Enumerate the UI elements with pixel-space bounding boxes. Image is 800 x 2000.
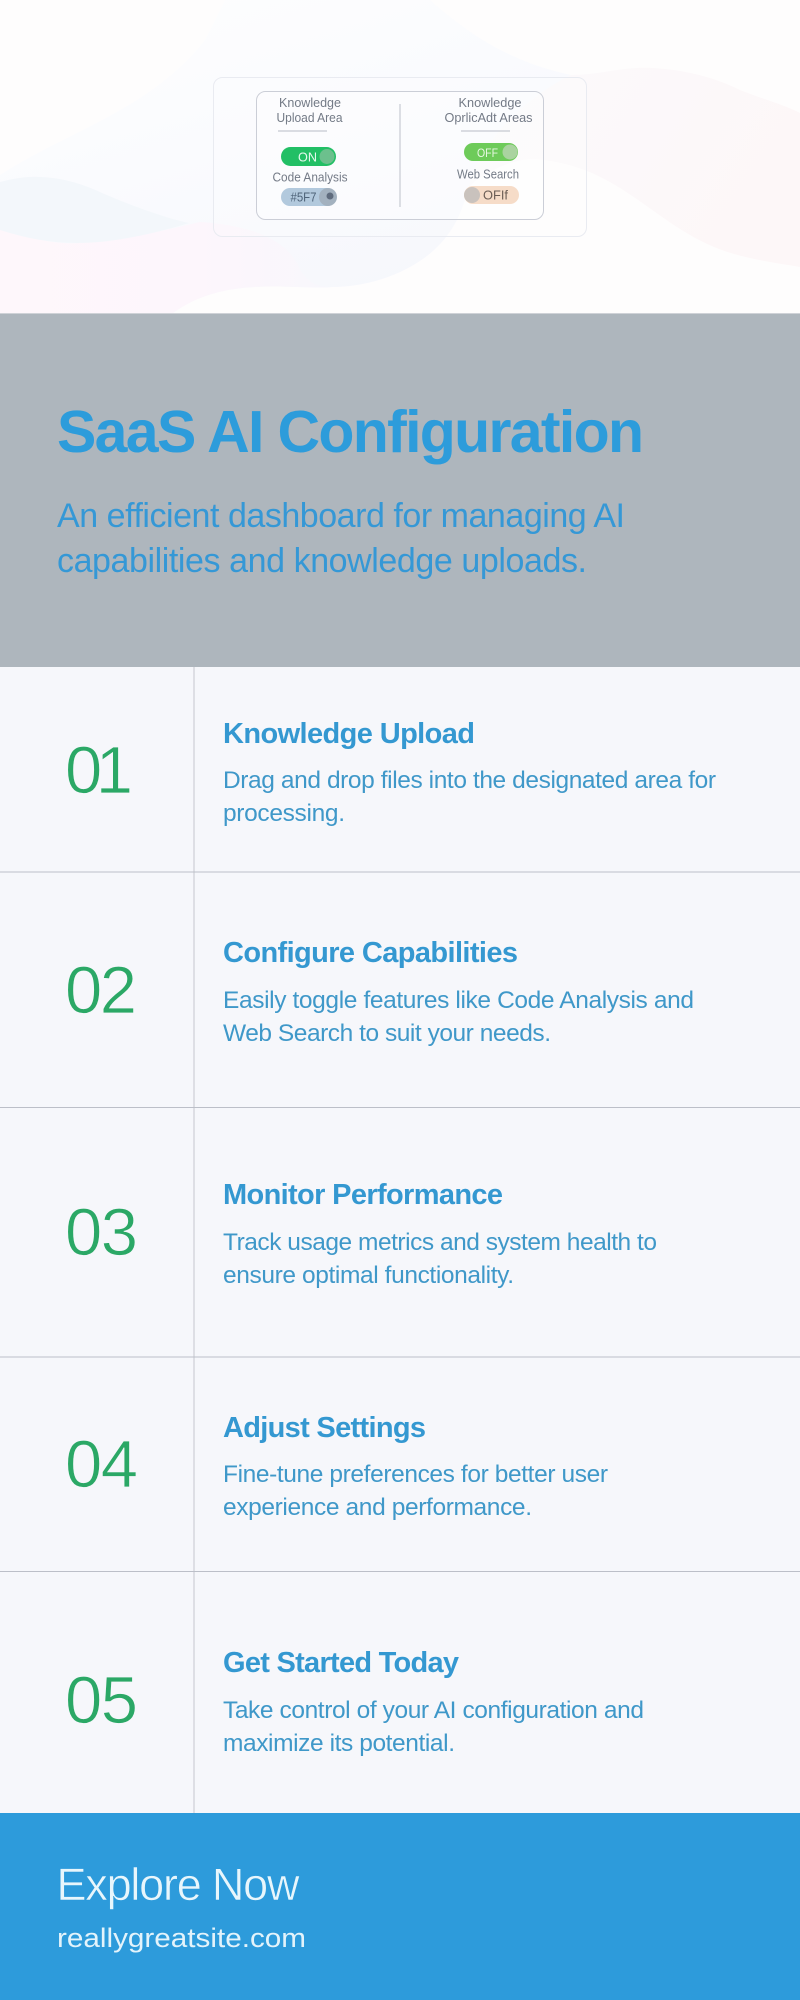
step 03: Monitor Performance bbox=[223, 1179, 503, 1211]
toggle: #5F7 bbox=[281, 188, 337, 206]
subtitle: capabilities and knowledge uploads. bbox=[57, 542, 587, 580]
toggle: OFF green: OFF bbox=[477, 146, 498, 160]
label: code analysis: Code Analysis bbox=[272, 170, 348, 184]
step 05: maximize its potential. bbox=[223, 1730, 455, 1757]
panel: dashboard mock-up bbox=[214, 78, 586, 236]
step 02: Web Search to suit your needs. bbox=[223, 1020, 551, 1047]
step 04: Fine-tune preferences for better user bbox=[223, 1461, 608, 1488]
step 01: Drag and drop files into the designated area for bbox=[223, 767, 716, 794]
step 04: 04 bbox=[65, 1427, 138, 1502]
toggle: OFIf bbox=[464, 186, 519, 204]
step 01: Knowledge Upload bbox=[223, 718, 475, 750]
step 05: Take control of your AI configuration and bbox=[223, 1697, 644, 1724]
step 03 bbox=[65, 1179, 657, 1289]
website link: reallygreatsite.com bbox=[57, 1923, 306, 1953]
left column labels: Upload Area bbox=[276, 111, 343, 125]
subtitle: An efficient dashboard for managing AI bbox=[57, 497, 625, 535]
step 04: experience and performance. bbox=[223, 1494, 532, 1521]
left column labels bbox=[276, 96, 343, 131]
left column labels: Knowledge bbox=[279, 96, 341, 110]
step 03: Track usage metrics and system health to bbox=[223, 1229, 657, 1256]
toggle: #5F7: #5F7 bbox=[290, 190, 317, 204]
step 01: 01 bbox=[65, 733, 133, 808]
heading: explore now: Explore Now bbox=[56, 1859, 300, 1910]
step 02: Easily toggle features like Code Analysis and bbox=[223, 987, 694, 1014]
label: web search: Web Search bbox=[457, 168, 519, 182]
toggle: ON bbox=[281, 147, 336, 166]
panel: steps list bbox=[0, 667, 800, 1814]
step 05: Get Started Today bbox=[223, 1647, 459, 1679]
step 03: ensure optimal functionality. bbox=[223, 1262, 514, 1289]
step 05: 05 bbox=[65, 1663, 138, 1738]
step 02: Configure Capabilities bbox=[223, 937, 518, 969]
right column labels: OprlicAdt Areas bbox=[444, 111, 532, 125]
step 01: processing. bbox=[223, 800, 345, 827]
step 02 bbox=[65, 937, 694, 1047]
step 02: 02 bbox=[65, 953, 137, 1028]
step 03: 03 bbox=[65, 1195, 138, 1270]
step 04: Adjust Settings bbox=[223, 1412, 426, 1444]
right column labels: Knowledge bbox=[458, 96, 522, 110]
subtitle bbox=[57, 497, 625, 580]
panel: title band bbox=[0, 313, 800, 667]
toggle: OFF green bbox=[464, 143, 518, 161]
title: SaaS AI Configuration bbox=[57, 399, 644, 465]
step 01 bbox=[65, 718, 716, 827]
toggle: ON: ON bbox=[298, 150, 317, 164]
step 05 bbox=[65, 1647, 644, 1757]
step 04 bbox=[65, 1412, 608, 1521]
panel: footer call to action bbox=[0, 1813, 800, 2000]
toggle: OFIf: OFIf bbox=[483, 188, 508, 202]
hero background with soft waves bbox=[0, 0, 800, 313]
right column labels bbox=[444, 96, 532, 131]
